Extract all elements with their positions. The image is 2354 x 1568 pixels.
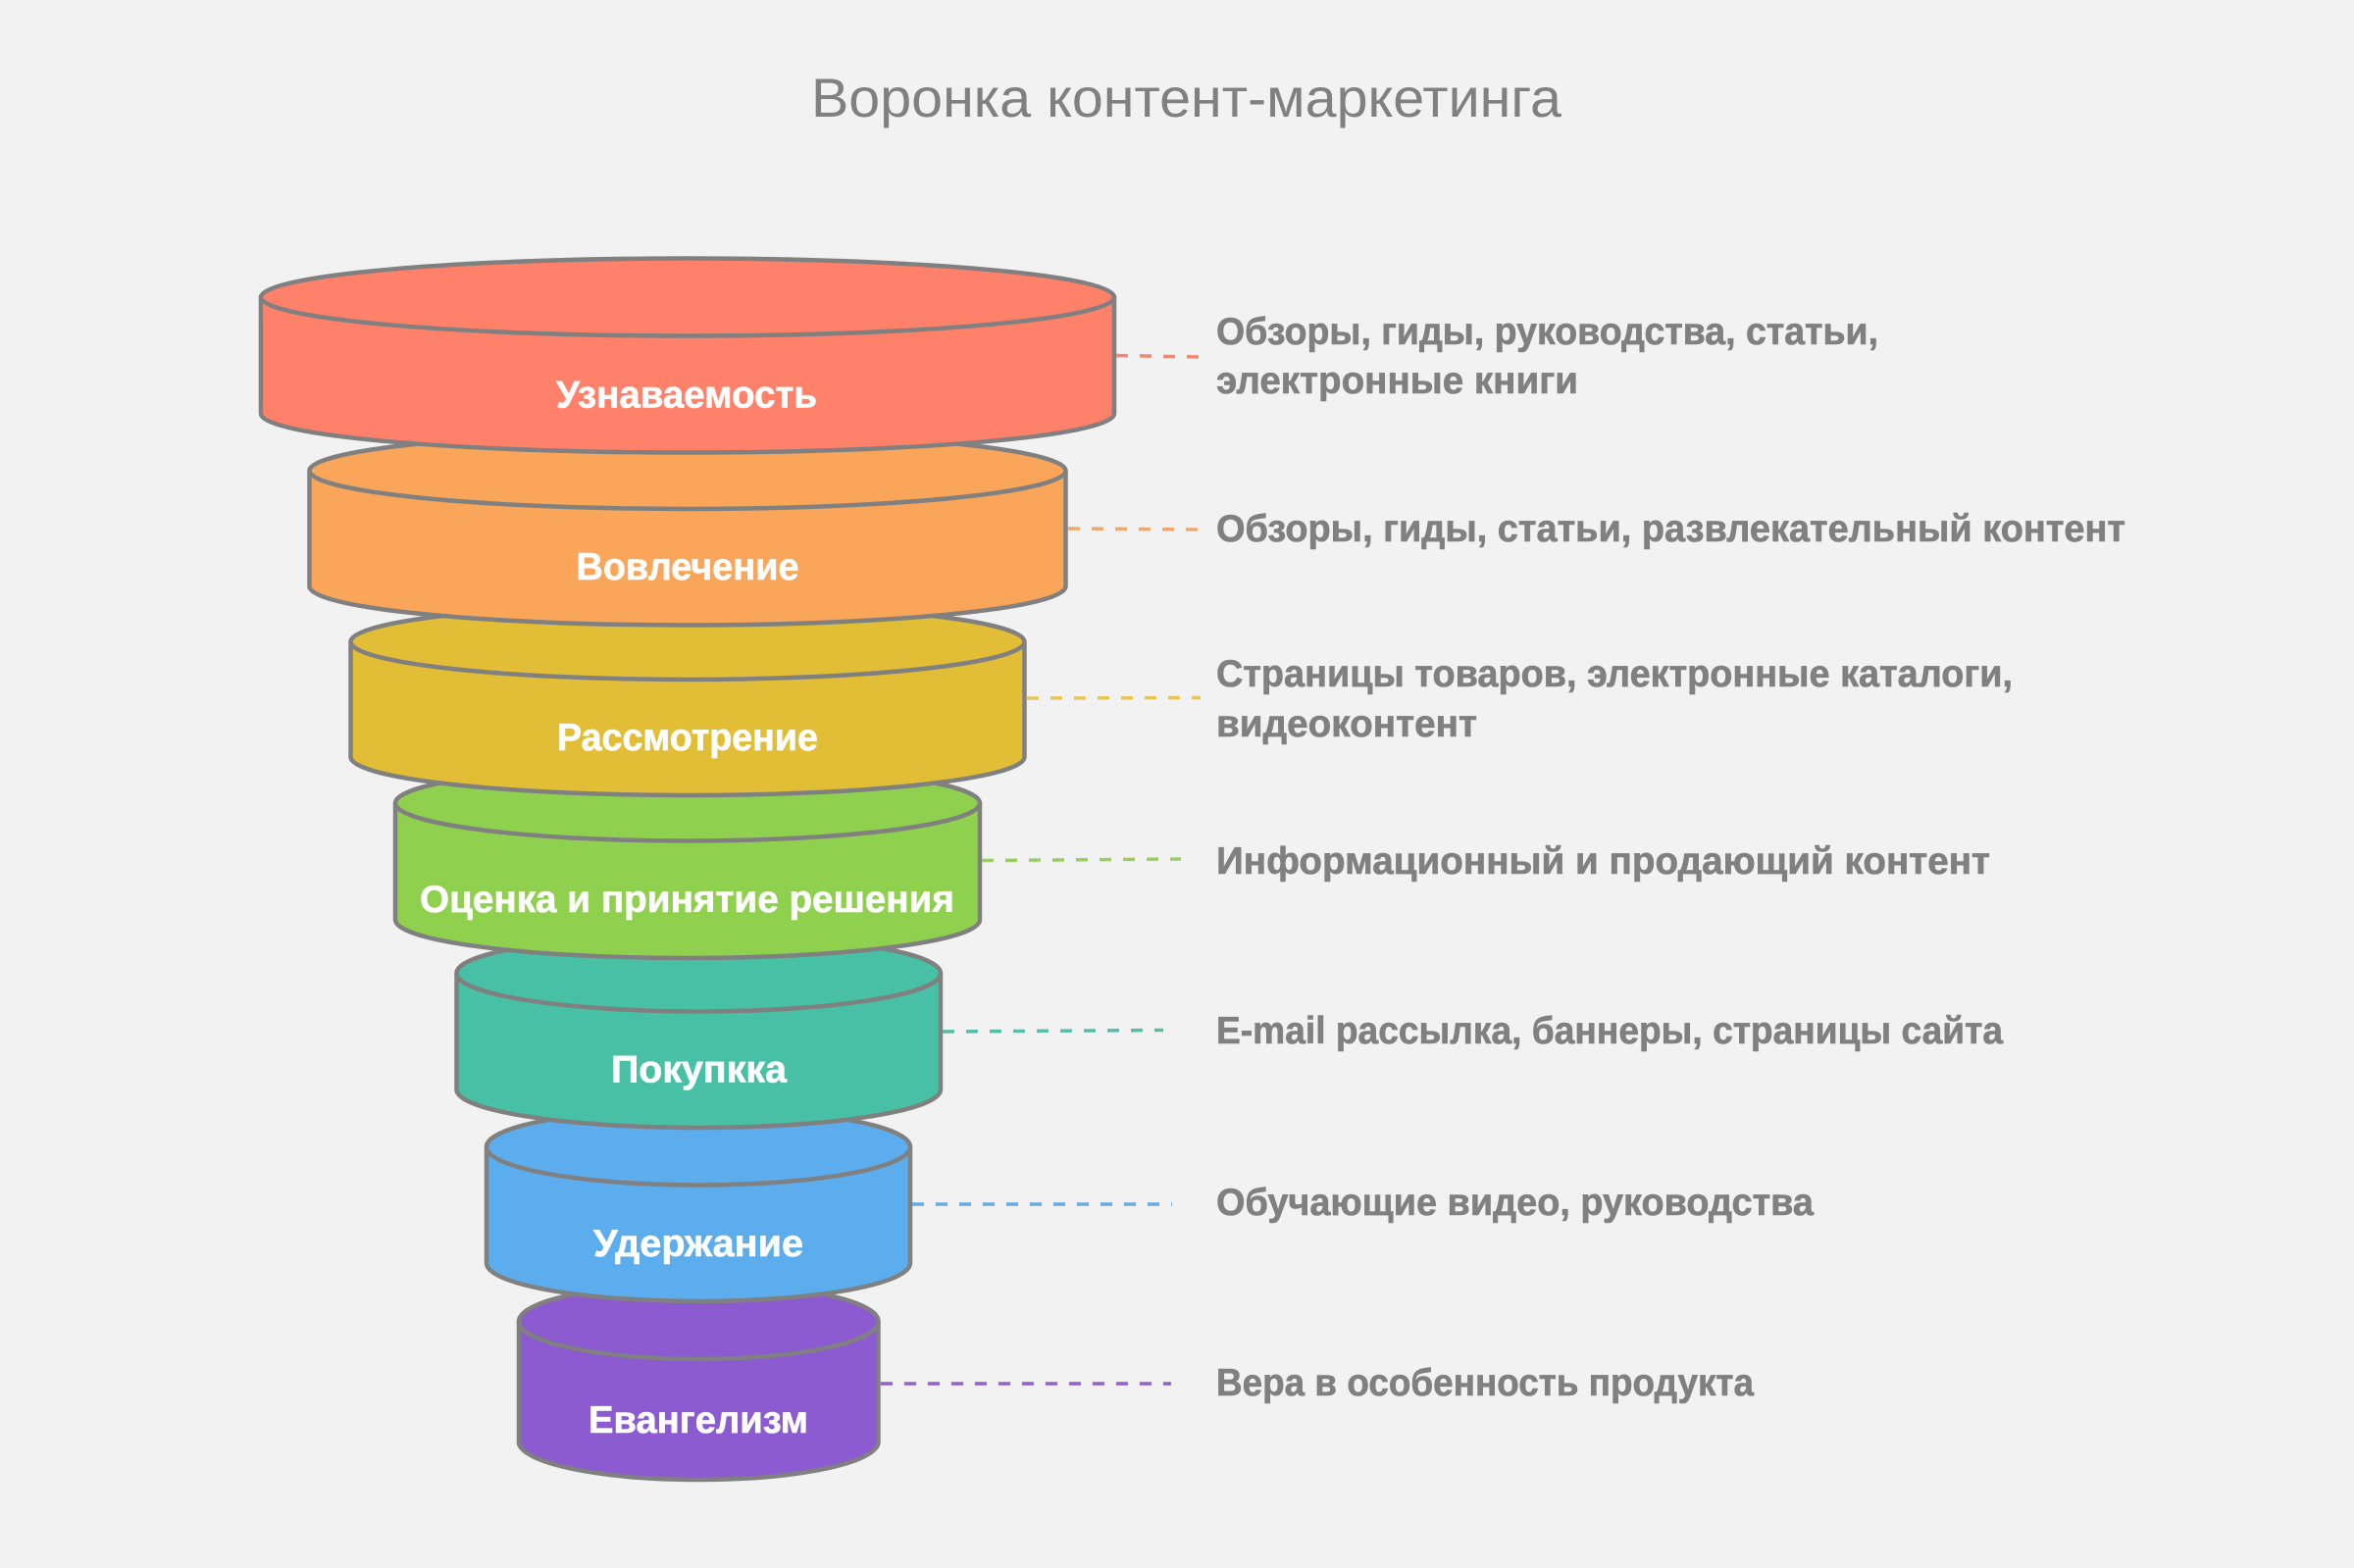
- description: Рассмотрение: Страницы товаров, электронные каталоги,: [1216, 653, 2013, 695]
- cylinder: Оценка и принятие решения: Оценка и принятие решения: [420, 879, 954, 921]
- description: Евангелизм: Вера в особенность продукта: [1216, 1362, 1754, 1404]
- description: Вовлечение: Обзоры, гиды, статьи, развлекательный контент: [1216, 508, 2125, 550]
- cylinder: Удержание: Удержание: [593, 1223, 803, 1265]
- cylinder: Оценка и принятие решения: [395, 765, 980, 958]
- description: Узнаваемость: [1216, 311, 1878, 402]
- cylinder: Узнаваемость: [261, 259, 1114, 453]
- connector: Оценка: [982, 859, 1181, 861]
- funnel: [261, 259, 1114, 1480]
- cylinder: Вовлечение: Вовлечение: [577, 546, 798, 588]
- cylinder: Рассмотрение: Рассмотрение: [557, 717, 818, 759]
- cylinder: Рассмотрение: [351, 604, 1024, 795]
- description: Узнаваемость: Обзоры, гиды, руководства, статьи,: [1216, 311, 1878, 353]
- description: Рассмотрение: [1216, 653, 2013, 745]
- cylinder: Покупкка: [457, 936, 941, 1128]
- cylinder: Вовлечение: [310, 432, 1065, 625]
- description: Оценка: Информационный и продающий контент: [1216, 840, 1990, 883]
- connector: Вовлечение: [1068, 529, 1199, 530]
- connector: Евангелизм: [881, 1382, 1171, 1386]
- cylinder: Покупкка: Покупкка: [611, 1049, 787, 1090]
- cylinder: Евангелизм: Евангелизм: [588, 1399, 808, 1442]
- description: Узнаваемость: электронные книги: [1216, 360, 1578, 402]
- cylinder: Евангелизм: [519, 1284, 879, 1480]
- cylinder: Удержание: [486, 1108, 910, 1301]
- description: Рассмотрение: видеоконтент: [1216, 703, 1477, 745]
- cylinder: Узнаваемость: Узнаваемость: [556, 375, 817, 416]
- description: Удержание: Обучающие видео, руководства: [1216, 1182, 1814, 1224]
- description: Покупкка: E-mail рассылка, баннеры, страницы сайта: [1216, 1010, 2003, 1052]
- connector: Рассмотрение: [1027, 696, 1201, 700]
- connector: Покупкка: [943, 1030, 1163, 1032]
- title: Воронка контент-маркетинга: [811, 67, 1562, 128]
- connector: Удержание: [912, 1202, 1172, 1206]
- connector: Узнаваемость: [1116, 355, 1199, 357]
